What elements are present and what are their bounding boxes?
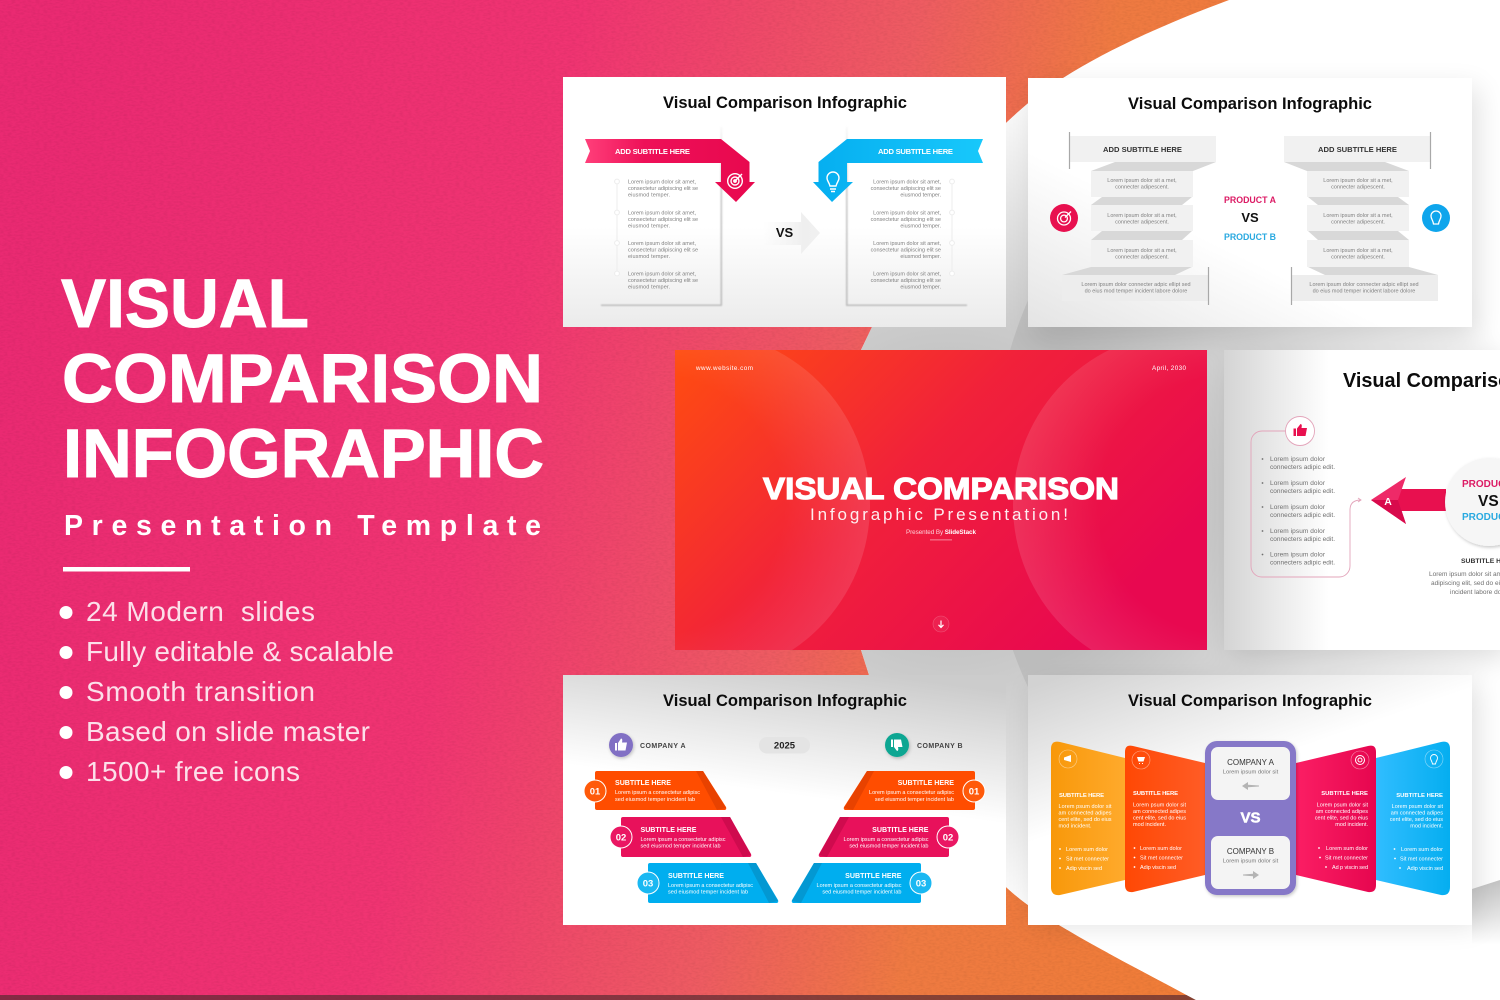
orange card [1051, 742, 1125, 895]
right text rows: eiusmod temper. [900, 254, 941, 260]
bullet list: connecters adipic edit. [1270, 560, 1335, 566]
left tab 02: 02 [616, 832, 626, 844]
icon: bulb badge [1422, 204, 1450, 232]
timeline right [950, 179, 954, 276]
orange card: cent elite, sed do eius [1058, 817, 1112, 823]
left tab 03: Lorem ipsum a consectetur adipisc [668, 883, 753, 889]
right text rows: Lorem ipsum dolor sit amet, [873, 272, 941, 278]
bullet list: Lorem ipsum dolor [1270, 504, 1326, 511]
fold body text: connecter adipescent. [1331, 184, 1385, 190]
slide 1 title: Visual Comparison Infographic [663, 93, 907, 112]
red-orange card: Lorem psum dolor sit [1133, 802, 1186, 808]
left text rows: eiusmod temper. [628, 224, 670, 230]
right text rows: consectetur adipiscing elit se [871, 248, 941, 254]
company B: COMPANY B [917, 743, 962, 750]
orange card: Lorem psum dolor sit [1058, 804, 1112, 810]
fold body text: connecter adipescent. [1115, 220, 1169, 226]
left tab 03: SUBTITLE HERE [668, 872, 724, 880]
pink card: cent elite, sed do eius [1315, 816, 1368, 822]
pink card [1296, 746, 1376, 892]
arrow: VS: VS [776, 225, 793, 240]
company A [609, 733, 686, 757]
right text rows: eiusmod temper. [900, 192, 941, 198]
orange card: mod incident. [1058, 824, 1092, 830]
icon: target badge [1050, 204, 1078, 232]
fold body text [1081, 178, 1419, 294]
blue card [1376, 742, 1450, 895]
right tab 03 [792, 863, 932, 903]
pink card: am connected adipes [1316, 809, 1368, 815]
fold body text: do eius mod temper incident labore dolore [1085, 288, 1187, 294]
purple centre column: COMPANY A [1227, 758, 1275, 767]
slide 6 title: Visual Comparison Infographic [1128, 691, 1372, 710]
fold body text: Lorem ipsum dolor connecter adpic ellipt sed [1309, 282, 1419, 288]
blue card: Lorem sum dolor [1401, 847, 1443, 853]
red-orange card: Lorem sum dolor [1140, 846, 1182, 852]
left text rows: consectetur adipiscing elit se [628, 186, 698, 192]
feature bullet list [60, 596, 394, 787]
cover title: VISUAL COMPARISON [763, 471, 1119, 506]
company A: COMPANY A [640, 743, 686, 750]
product comparison labels: PRODUCT A [1224, 195, 1277, 205]
orange card: Adip viscin sed [1066, 866, 1102, 872]
timeline left [615, 179, 619, 276]
bullet list: connecters adipic edit. [1270, 464, 1335, 471]
year pill: 2025 [774, 740, 796, 752]
fold body text: Lorem ipsum dolor sit a met, [1323, 178, 1393, 184]
background: white circle with grey shading [861, 0, 1500, 1000]
left tab 01 [584, 771, 726, 810]
right text rows: Lorem ipsum dolor sit amet, [873, 180, 941, 186]
bullet list: connecters adipic edit. [1270, 536, 1335, 543]
left column: title and feature list [60, 265, 544, 787]
panel: slide 6, fan of cards [1028, 675, 1472, 925]
left text rows: eiusmod temper. [628, 254, 670, 260]
year pill [759, 737, 810, 754]
panel: slide 5, company tabs [563, 675, 1006, 925]
purple centre column: COMPANY B [1227, 847, 1274, 856]
red-orange card: mod incident. [1133, 822, 1166, 828]
left tab 02 [610, 817, 751, 857]
cover subtitle: Infographic Presentation! [810, 505, 1068, 524]
product circle: VS [1478, 493, 1499, 510]
left tab 03 [637, 863, 778, 903]
right text rows: eiusmod temper. [900, 224, 941, 230]
left tab 03: 03 [643, 878, 653, 890]
right tab 03: Lorem ipsum a consectetur adipisc [817, 883, 902, 889]
right tab 01: sed eiusmod temper incident lab [875, 797, 954, 803]
slide shadows [1034, 88, 1500, 925]
panel: centre cover slide [675, 350, 1207, 650]
bullet list: connecters adipic edit. [1270, 488, 1335, 495]
fold headers [1103, 145, 1397, 154]
left text rows: consectetur adipiscing elit se [628, 278, 698, 284]
bullet list: Lorem ipsum dolor [1270, 456, 1326, 463]
orange card: am connected adipes [1058, 810, 1112, 816]
pink card: SUBTITLE HERE [1321, 791, 1368, 797]
blue card: am connected adipes [1391, 810, 1443, 816]
fold body text: Lorem ipsum dolor sit a met, [1107, 178, 1177, 184]
left tab 03: sed eiusmod temper incident lab [668, 890, 748, 896]
red-orange card: Sit met connecter [1140, 856, 1183, 862]
orange card: SUBTITLE HERE [1059, 793, 1104, 799]
left tab 01: Lorem ipsum a consectetur adipisc [615, 790, 700, 796]
outline box with connector [1251, 431, 1361, 577]
red-orange card [1125, 746, 1205, 892]
fold body text: Lorem ipsum dolor connecter adpic ellipt sed [1081, 282, 1191, 288]
main title [61, 265, 544, 492]
left tab 01: SUBTITLE HERE [615, 779, 671, 787]
pink ribbon arrow [585, 139, 755, 202]
arrow: A: A [1384, 496, 1392, 508]
icon: target [728, 174, 742, 188]
right tab 03: SUBTITLE HERE [845, 872, 902, 880]
decorative circles [675, 350, 1207, 650]
feature bullet list: Smooth transition [86, 676, 315, 707]
fold body text: Lorem ipsum dolor sit a met, [1107, 248, 1177, 254]
left text rows: eiusmod temper. [628, 284, 670, 290]
fold body text: connecter adipescent. [1115, 254, 1169, 260]
right tab 01: Lorem ipsum a consectetur adipisc [869, 790, 954, 796]
right tab 02: SUBTITLE HERE [872, 826, 929, 834]
left text rows: eiusmod temper. [628, 192, 670, 198]
right tab 03: sed eiusmod temper incident lab [822, 890, 902, 896]
main title: INFOGRAPHIC [63, 415, 544, 492]
fold headers: ADD SUBTITLE HERE [1103, 145, 1182, 154]
subtitle block [1429, 558, 1500, 596]
feature bullet list: Fully editable & scalable [86, 636, 394, 667]
red-orange card: cent elite, sed do eius [1133, 816, 1186, 822]
right text rows: consectetur adipiscing elit se [871, 217, 941, 223]
product comparison labels: VS [1241, 210, 1259, 225]
slide 5 title: Visual Comparison Infographic [663, 691, 907, 710]
red-orange card: am connected adipes [1133, 809, 1186, 815]
right tab 01 [844, 771, 985, 810]
pink card: Ad p viscin sed [1332, 865, 1368, 871]
underline rule [63, 567, 190, 572]
left tab 01: sed eiusmod temper incident lab [615, 797, 695, 803]
product comparison labels: PRODUCT B [1224, 232, 1276, 242]
purple centre column: VS [1240, 810, 1261, 826]
slide 2 title: Visual Comparison Infographic [1128, 94, 1372, 113]
purple centre column [1205, 741, 1296, 895]
right tab 01: SUBTITLE HERE [898, 779, 954, 787]
bullet list: Lorem ipsum dolor [1270, 480, 1326, 487]
right text rows: Lorem ipsum dolor sit amet, [873, 241, 941, 247]
main title: VISUAL [61, 265, 309, 342]
fold body text: connecter adipescent. [1115, 184, 1169, 190]
left text rows [628, 180, 698, 290]
pink card: Sit met connecter [1325, 856, 1368, 862]
blue ribbon arrow [813, 139, 983, 202]
icon: thumbs up [1286, 416, 1314, 446]
panel: slide 1, ribbon arrows [563, 77, 1006, 327]
blue card: cent elite, sed do eius [1390, 817, 1443, 823]
right text rows: consectetur adipiscing elit se [871, 186, 941, 192]
fold body text: connecter adipescent. [1331, 254, 1385, 260]
purple centre column: Lorem ipsum dolor sit [1223, 858, 1279, 864]
right fold stack [1284, 132, 1438, 305]
blue card: Sit met connecter [1400, 856, 1443, 862]
arrow: A [1371, 477, 1446, 524]
blue card: Adip viscin sed [1407, 866, 1443, 872]
product comparison labels [1224, 195, 1277, 242]
feature bullet list: 24 Modern slides [86, 596, 315, 627]
left fold stack [1062, 132, 1216, 305]
company B [885, 733, 962, 757]
subtitle: Presentation Template [64, 510, 541, 542]
ribbon labels: ADD SUBTITLE HERE [615, 147, 690, 156]
right text rows [871, 180, 941, 290]
bullet list: Lorem ipsum dolor [1270, 528, 1326, 535]
bullet list [1262, 456, 1335, 566]
right tab 02: 02 [943, 832, 953, 844]
red-orange card: SUBTITLE HERE [1133, 791, 1178, 797]
presenter credit: Presented By SlideStack [906, 529, 976, 536]
right text rows: consectetur adipiscing elit se [871, 278, 941, 284]
feature bullet list: 1500+ free icons [86, 756, 300, 787]
panel: slide 4, arrow A (cropped at right edge) [1224, 350, 1500, 650]
left text rows: Lorem ipsum dolor sit amet, [628, 180, 696, 186]
blue card: Lorem psum dolor sit [1392, 804, 1443, 810]
fold body text: connecter adipescent. [1331, 220, 1385, 226]
right text rows: Lorem ipsum dolor sit amet, [873, 210, 941, 216]
left tab 02: sed eiusmod temper incident lab [640, 844, 720, 850]
orange card: Lorem sum dolor [1066, 847, 1108, 853]
right tab 02: sed eiusmod temper incident lab [849, 844, 928, 850]
right tab 03: 03 [916, 878, 926, 890]
left text rows: Lorem ipsum dolor sit amet, [628, 272, 696, 278]
right tab 02 [819, 817, 959, 857]
left text rows: Lorem ipsum dolor sit amet, [628, 241, 696, 247]
fold body text: Lorem ipsum dolor sit a met, [1323, 213, 1393, 219]
orange card: Sit met connecter [1066, 856, 1109, 862]
left text rows: consectetur adipiscing elit se [628, 217, 698, 223]
left and right card edges [601, 127, 967, 306]
pink card: mod incident. [1335, 822, 1368, 828]
icon: light bulb [827, 172, 839, 192]
pink card: Lorem sum dolor [1326, 846, 1368, 852]
fold body text: Lorem ipsum dolor sit a met, [1107, 213, 1177, 219]
date label: April, 2030 [1152, 365, 1186, 372]
left text rows: Lorem ipsum dolor sit amet, [628, 210, 696, 216]
blue card: mod incident. [1410, 824, 1443, 830]
pink card: Lorem psum dolor sit [1317, 802, 1368, 808]
bullet list: connecters adipic edit. [1270, 512, 1335, 519]
main title: COMPARISON [62, 340, 543, 417]
fold headers: ADD SUBTITLE HERE [1318, 145, 1397, 154]
icon: down arrow [933, 616, 949, 632]
left tab 02: SUBTITLE HERE [640, 826, 697, 834]
panel: slide 2, stacked folds [1028, 78, 1472, 327]
short rule [930, 538, 952, 541]
product circle [1445, 458, 1500, 546]
fold body text: do eius mod temper incident labore dolore [1313, 288, 1415, 294]
right text rows: eiusmod temper. [900, 284, 941, 290]
website label: www.website.com [695, 365, 753, 372]
right tab 01: 01 [969, 786, 980, 798]
left tab 02: Lorem ipsum a consectetur adipisc [640, 837, 726, 843]
feature bullet list: Based on slide master [86, 716, 370, 747]
fold body text: Lorem ipsum dolor sit a met, [1323, 248, 1393, 254]
bullet list: Lorem ipsum dolor [1270, 552, 1326, 558]
ribbon labels [615, 147, 953, 156]
purple centre column: Lorem ipsum dolor sit [1223, 770, 1279, 776]
left tab 01: 01 [590, 786, 601, 798]
red-orange card: Adip viscin sed [1140, 865, 1176, 871]
blue card: SUBTITLE HERE [1396, 793, 1443, 799]
arrow: VS [763, 212, 820, 254]
ribbon labels: ADD SUBTITLE HERE [878, 147, 953, 156]
right tab 02: Lorem ipsum a consectetur adipisc [844, 837, 929, 843]
left text rows: consectetur adipiscing elit se [628, 248, 698, 254]
